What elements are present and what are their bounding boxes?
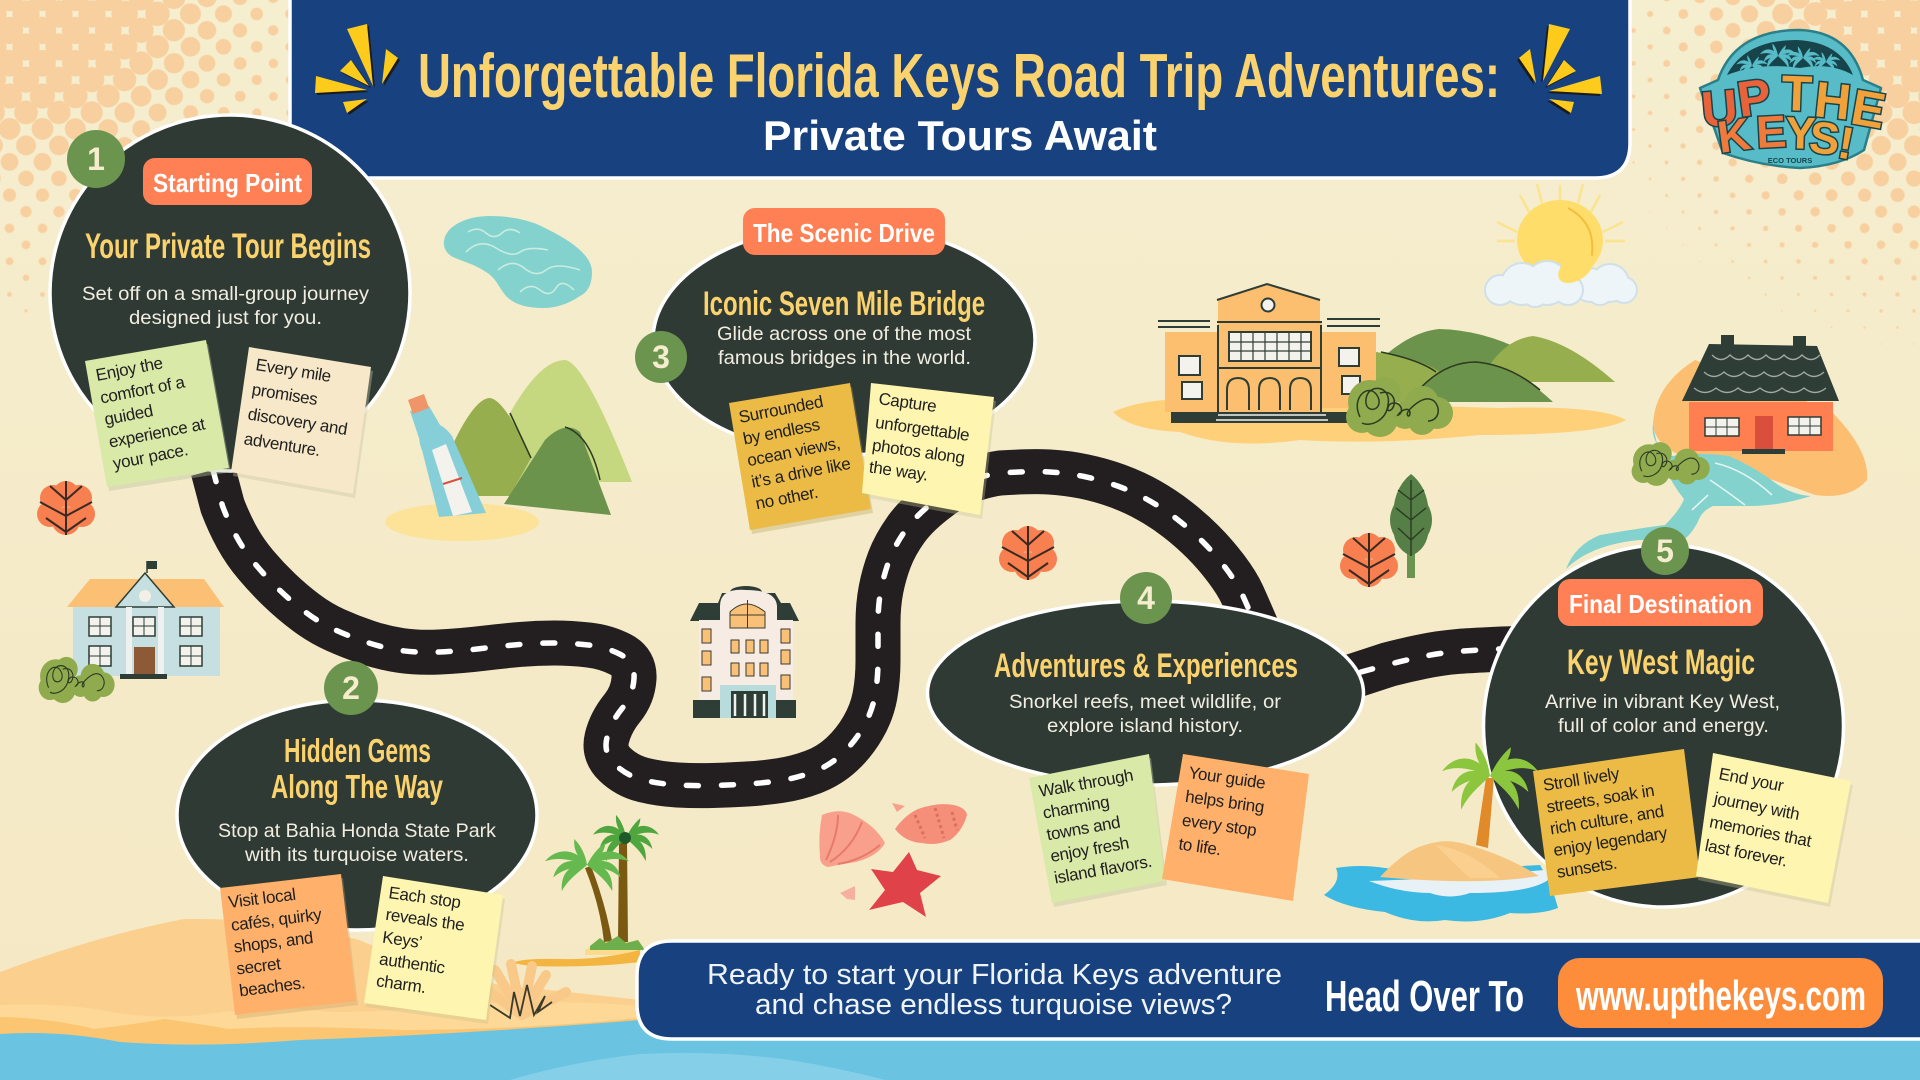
sticky note: charming towns: Walk through [1037, 766, 1135, 801]
body text [717, 323, 972, 369]
heading [271, 732, 443, 805]
illustration: orange leaf left [37, 481, 95, 535]
body text: designed just for you. [129, 307, 322, 329]
sticky note: endless ocean views: it’s a drive like [750, 454, 852, 492]
sticky note: local cafes: cafés, quirky [230, 905, 323, 935]
sticky note: charming towns: island flavors. [1053, 852, 1153, 888]
logo: Up The Keys: Y [1785, 107, 1816, 159]
sticky note: endless ocean views: no other. [754, 483, 819, 513]
sticky note: guided comfort: Enjoy the [94, 353, 164, 385]
logo: Up The Keys: T [1781, 65, 1813, 122]
header banner [290, 0, 1630, 178]
sticky note: guided comfort: your pace. [111, 440, 189, 473]
illustration: mountains with bottle on sand [385, 360, 632, 541]
call to action banner [637, 941, 1920, 1039]
sticky note: stroll lively streets: enjoy legendary [1552, 823, 1669, 860]
sticky note: charming towns: enjoy fresh [1049, 833, 1130, 866]
sticky note: every mile: discovery and [247, 405, 349, 439]
sticky note: capture photos [862, 383, 996, 519]
icon: left sunburst [315, 24, 400, 115]
illustration: red house with river [1566, 335, 1867, 569]
logo: Up The Keys [1699, 30, 1890, 169]
illustration: two palm trees on sand [512, 815, 659, 966]
sticky note: guided comfort: experience at [107, 414, 207, 452]
sticky note: end your journey [1696, 753, 1853, 907]
logo: Up The Keys: E [1847, 79, 1890, 140]
sticky note: every mile: promises [250, 380, 319, 409]
body text: full of color and energy. [1558, 715, 1769, 737]
sticky note: charming towns: charming [1041, 792, 1111, 823]
badge: number 4: 4 [1137, 580, 1155, 616]
tag: starting point: Starting Point [153, 168, 302, 198]
body text [218, 820, 496, 866]
badge: number 5 [1641, 527, 1689, 575]
label: head over to: Head Over To [1325, 972, 1524, 1021]
badge: number 4 [1120, 572, 1172, 624]
road: winding route from stop 1 to stop 4 [213, 470, 1262, 786]
panel: step 1 starting point [50, 115, 410, 498]
button: website [1558, 958, 1883, 1028]
sticky note: guided comfort [85, 340, 231, 491]
badge: number 5: 5 [1656, 533, 1674, 569]
badge: number 2: 2 [342, 670, 360, 706]
body text: Stop at Bahia Honda State Park [218, 820, 496, 842]
sticky note: each stop: Each stop [387, 883, 462, 912]
body text: Arrive in vibrant Key West, [1545, 691, 1780, 713]
sticky note: each stop: Keys’ [381, 928, 423, 952]
logo: Up The Keys: K [1714, 108, 1754, 163]
panel: step 2 hidden gems [177, 661, 537, 1024]
road: stretch from stop 4 to stop 5 [1335, 648, 1530, 682]
heading: Hidden Gems [284, 732, 431, 769]
subtitle: Private Tours Await [763, 112, 1157, 159]
sticky note: each stop: authentic [378, 949, 447, 978]
badge: number 2 [324, 661, 378, 715]
logo: Up The Keys: P [1734, 68, 1775, 128]
sticky note: local cafes: secret [235, 954, 282, 978]
call to action text [707, 959, 1282, 1021]
sticky note: end your journey: End your [1717, 764, 1786, 796]
sticky note: charming towns: towns and [1045, 813, 1122, 844]
heading: Iconic Seven Mile Bridge [703, 285, 985, 323]
heading: Your Private Tour Begins [85, 227, 371, 266]
sticky note: your guide: Your guide [1187, 763, 1267, 793]
illustration: spiky beach plant [480, 964, 566, 1018]
sticky note: guided comfort: guided [103, 401, 154, 429]
sticky note: charming towns [1029, 754, 1167, 907]
body text: Set off on a small-group journey [82, 283, 369, 305]
tag: final destination: Final Destination [1569, 589, 1752, 619]
badge: number 3: 3 [652, 339, 670, 375]
illustration: seashells and starfish [819, 803, 967, 917]
heading: Adventures & Experiences [994, 647, 1298, 685]
illustration: turquoise pond [444, 216, 592, 308]
sticky note: every mile: Every mile [254, 355, 332, 386]
sticky note: local cafes: shops, and [233, 928, 314, 957]
halftone dots: top right [1527, 0, 1920, 410]
sticky note: local cafes: beaches. [238, 973, 306, 1000]
tag: the scenic drive [743, 208, 945, 255]
panel: step 4 adventures [928, 572, 1364, 907]
badge: number 1: 1 [87, 141, 105, 177]
logo: Up The Keys: E [1755, 105, 1787, 158]
sticky note: endless ocean views: by endless [741, 415, 821, 449]
sticky note: each stop: charm. [375, 971, 427, 997]
sticky note: endless ocean views: Surrounded [737, 392, 825, 427]
sticky note: guided comfort: comfort of a [99, 372, 187, 408]
sticky note: stroll lively streets: rich culture, and [1549, 802, 1665, 838]
body text: with its turquoise waters. [244, 844, 469, 866]
sticky note: capture photos: Capture [877, 389, 938, 416]
body text: Glide across one of the most [717, 323, 972, 345]
body text: famous bridges in the world. [718, 347, 971, 369]
sticky note: each stop: reveals the [384, 905, 466, 935]
sticky note: endless ocean views [729, 383, 873, 534]
logo: Up The Keys: U [1699, 79, 1740, 138]
sticky note: local cafes [220, 874, 358, 1019]
body text [1009, 691, 1282, 737]
sticky note: your guide: every stop [1181, 811, 1258, 840]
logo: Up The Keys: H [1812, 71, 1854, 131]
sticky note: end your journey: memories that [1708, 812, 1813, 851]
icon: right sunburst [1517, 24, 1602, 115]
sticky note: your guide [1162, 754, 1309, 901]
illustration: orange building with hills [1113, 284, 1626, 444]
panel: step 3 scenic drive [635, 208, 1035, 534]
sticky note: your guide: to life. [1177, 834, 1222, 859]
body text [82, 283, 369, 329]
sticky note: end your journey: journey with [1711, 789, 1801, 824]
tag: final destination [1558, 579, 1763, 626]
logo: Up The Keys: S [1807, 111, 1842, 165]
illustration: small green tree [1390, 474, 1432, 578]
logo: Up The Keys: ECO TOURS [1768, 156, 1812, 165]
tag: the scenic drive: The Scenic Drive [753, 218, 935, 248]
sticky note: every mile [231, 347, 373, 498]
illustration: schoolhouse with flag [39, 561, 224, 703]
heading: Along The Way [271, 768, 443, 805]
badge: number 1 [67, 130, 125, 188]
sticky note: your guide: helps bring [1184, 787, 1265, 817]
sticky note: stroll lively streets: Stroll lively [1542, 764, 1621, 795]
sticky note: capture photos: unforgettable [874, 413, 971, 445]
beach and ocean strip [0, 919, 1920, 1080]
sticky note: capture photos: the way. [868, 457, 929, 485]
logo: Up The Keys: ! [1834, 117, 1858, 169]
call to action text: and chase endless turquoise views? [755, 989, 1232, 1021]
badge: number 3 [635, 331, 687, 383]
tag: starting point [143, 158, 312, 205]
call to action text: Ready to start your Florida Keys adventure [707, 959, 1282, 991]
illustration: orange leaf right [1340, 533, 1398, 587]
illustration: hotel building [690, 586, 799, 718]
sticky note: endless ocean views: ocean views, [746, 434, 842, 470]
sticky note: local cafes: Visit local [227, 885, 297, 912]
title: Unforgettable Florida Keys Road Trip Adventures: [418, 42, 1500, 111]
body text [1545, 691, 1780, 737]
body text: Snorkel reefs, meet wildlife, or [1009, 691, 1282, 713]
illustration: orange leaf centre [999, 526, 1057, 580]
panel: step 5 final destination [1324, 527, 1853, 921]
heading: Key West Magic [1567, 643, 1755, 682]
body text: explore island history. [1047, 715, 1243, 737]
illustration: palm island in water [1324, 742, 1558, 921]
sticky note: stroll lively streets [1533, 749, 1700, 896]
sticky note: stroll lively streets: streets, soak in [1545, 781, 1655, 817]
illustration: sun behind cloud [1486, 184, 1636, 306]
sticky note: end your journey: last forever. [1703, 836, 1789, 870]
sticky note: every mile: adventure. [243, 429, 322, 460]
sticky note: stroll lively streets: sunsets. [1555, 854, 1618, 882]
sticky note: capture photos: photos along [871, 436, 966, 467]
sticky note: each stop [364, 876, 505, 1024]
halftone dots: top left [0, 0, 410, 400]
